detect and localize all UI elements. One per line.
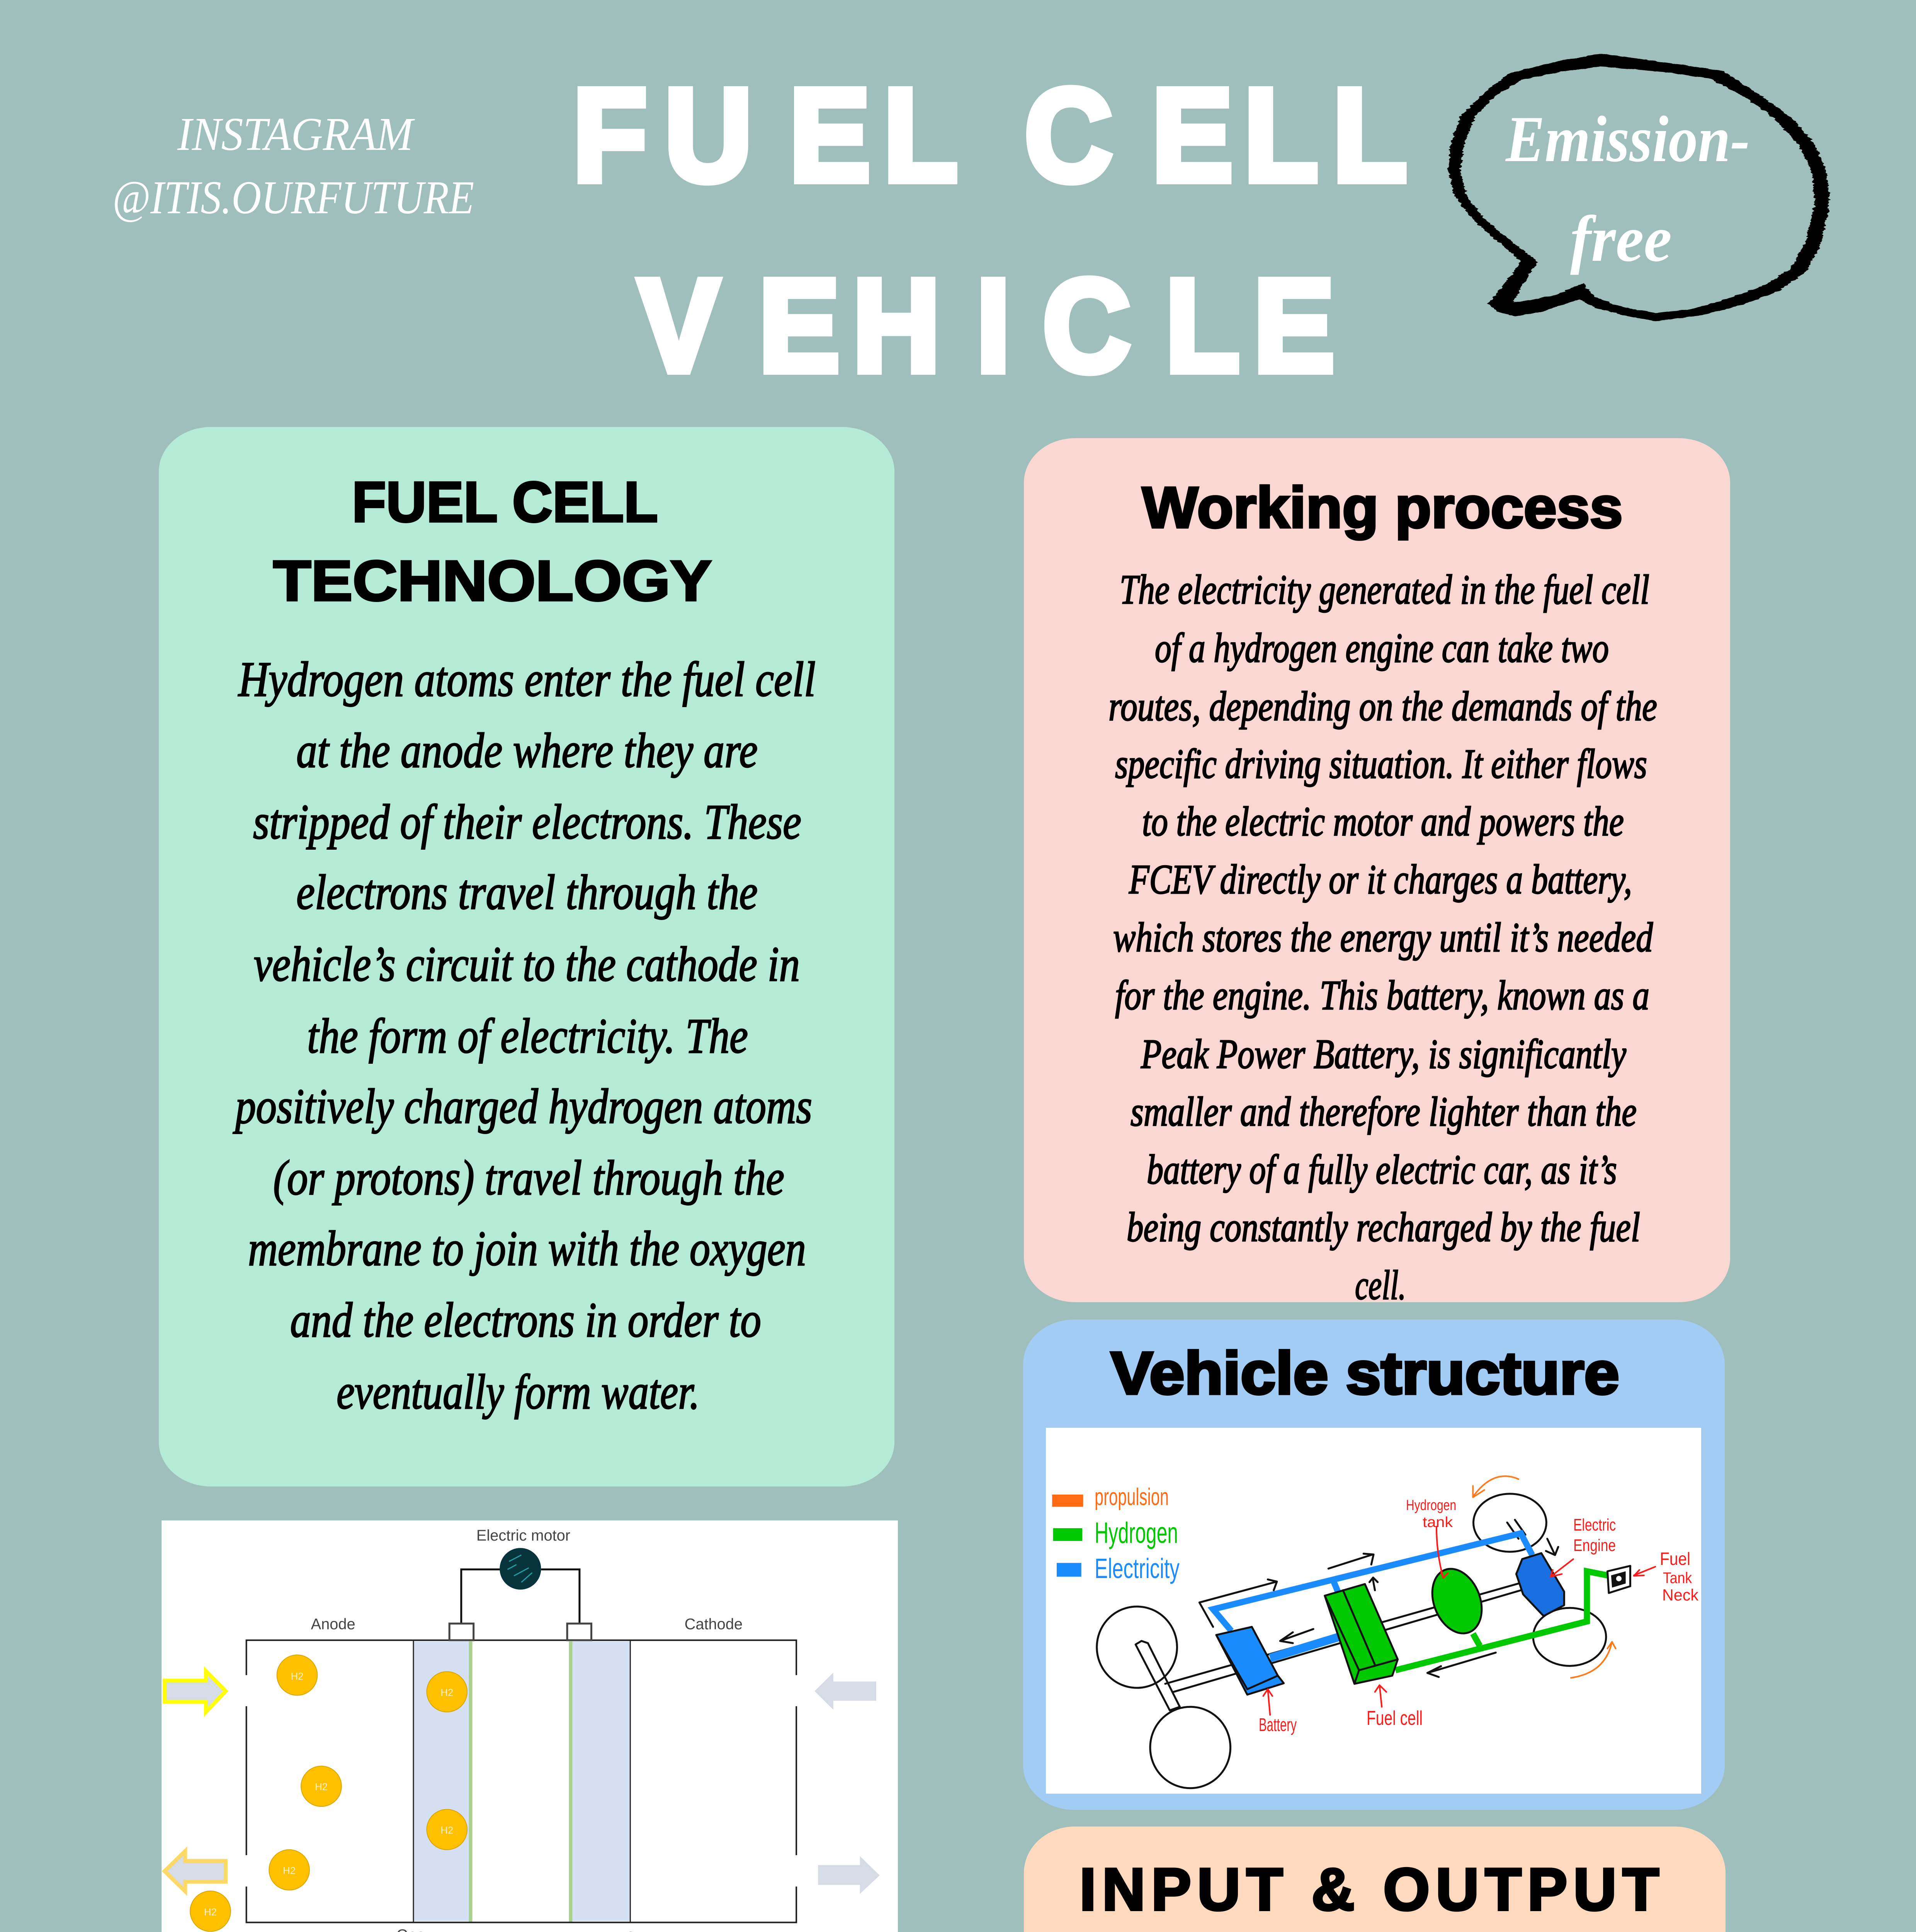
speech bubble: emission-free: Emission- (1505, 103, 1750, 175)
body text: fuel cell technology: (or protons) travel through the (273, 1150, 784, 1205)
body text: working process: for the engine. This battery, known as a (1115, 973, 1649, 1019)
legend labels: Electricity (1095, 1553, 1180, 1584)
body text: working process: being constantly recharged by the fuel (1127, 1204, 1640, 1250)
body text: working process: to the electric motor and powers the (1142, 799, 1624, 845)
body text: fuel cell technology (233, 652, 816, 1419)
fuel tank neck (1607, 1566, 1630, 1593)
circuit wires and terminals (449, 1570, 592, 1640)
cell casing (247, 1640, 796, 1922)
title (573, 62, 1407, 399)
battery (1216, 1627, 1284, 1695)
hydrogen molecules (190, 1655, 467, 1931)
arrows (165, 1671, 880, 1894)
heading: fuel cell technology: FUEL CELL (352, 470, 658, 534)
body text: fuel cell technology: membrane to join with the oxygen (248, 1221, 806, 1276)
legend labels (1095, 1484, 1180, 1584)
hydrogen molecules: H2 (291, 1671, 303, 1682)
body text: fuel cell technology: stripped of their electrons. These (253, 794, 801, 849)
body text: working process: The electricity generated in the fuel cell (1120, 567, 1649, 613)
diagram labels (311, 1527, 743, 1932)
flow arrows (1199, 1539, 1558, 1677)
body text: fuel cell technology: vehicle’s circuit to the cathode in (254, 937, 800, 992)
heading: fuel cell technology: TECHNOLOGY (273, 549, 712, 613)
instagram handle: INSTAGRAM (177, 108, 415, 160)
panel: input and output (1024, 1827, 1726, 1932)
vehicle sketch (1046, 1428, 1701, 1794)
body text: working process (1108, 567, 1657, 1308)
panel: vehicle structure (1023, 1320, 1725, 1810)
body text: fuel cell technology: electrons travel through the (296, 865, 758, 920)
instagram handle: @ITIS.OURFUTURE (112, 172, 474, 224)
body text: working process: smaller and therefore lighter than the (1131, 1089, 1637, 1135)
body text: working process: FCEV directly or it charges a battery, (1129, 857, 1632, 903)
body text: working process: Peak Power Battery, is significantly (1141, 1031, 1626, 1077)
part labels: Tank (1663, 1570, 1692, 1587)
legend swatches (1052, 1495, 1083, 1577)
body text: fuel cell technology: the form of electricity. The (307, 1009, 748, 1063)
part labels: tank (1423, 1514, 1453, 1531)
panel: working process (1024, 438, 1730, 1308)
hydrogen molecules: H2 (440, 1687, 453, 1698)
speech bubble: emission-free: free (1570, 202, 1672, 275)
part labels: Neck (1662, 1586, 1699, 1604)
body text: working process: battery of a fully electric car, as it’s (1147, 1147, 1617, 1193)
hydrogen tank (1426, 1567, 1488, 1635)
title: VEHICLE (638, 252, 1334, 399)
label pointers (1263, 1527, 1655, 1715)
part labels: Fuel cell (1367, 1707, 1423, 1730)
diagram labels: Anode (311, 1616, 355, 1633)
hydrogen molecules: H2 (440, 1825, 453, 1836)
body text: working process: routes, depending on the demands of the (1108, 684, 1657, 730)
body text: working process: cell. (1355, 1262, 1406, 1308)
part labels: Hydrogen (1406, 1497, 1456, 1514)
hydrogen molecules: H2 (315, 1782, 328, 1793)
heading: fuel cell technology (273, 470, 712, 613)
body text: fuel cell technology: at the anode where they are (296, 723, 758, 778)
rotation arrows (1473, 1476, 1616, 1678)
part labels: Engine (1573, 1536, 1616, 1555)
diagram: fuel cell step 1 (162, 1520, 898, 1932)
part labels: Electric (1573, 1515, 1616, 1534)
electric engine (1516, 1553, 1564, 1616)
fuel cell stack (1325, 1584, 1398, 1684)
electricity lines (1213, 1533, 1532, 1631)
instagram handle (112, 108, 474, 224)
body text: fuel cell technology: and the electrons in order to (290, 1293, 761, 1347)
part labels (1259, 1497, 1699, 1735)
legend labels: propulsion (1095, 1484, 1169, 1510)
title: FUEL CELL (573, 62, 1407, 209)
panel: fuel cell technology (159, 427, 894, 1486)
body text: working process: which stores the energy until it’s needed (1113, 915, 1653, 961)
hydrogen molecules: H2 (204, 1907, 217, 1918)
part labels: Battery (1259, 1715, 1297, 1735)
electric motor (500, 1548, 541, 1590)
body text: working process: of a hydrogen engine can take two (1155, 625, 1609, 671)
speech bubble: emission-free (1448, 54, 1829, 321)
gas diffusion layers and membrane (413, 1640, 630, 1922)
diagram labels: Cathode (685, 1616, 743, 1633)
diagram labels: Electric motor (476, 1527, 570, 1544)
heading: working process: Working process (1142, 475, 1623, 540)
body text: fuel cell technology: Hydrogen atoms enter the fuel cell (238, 652, 816, 707)
body text: fuel cell technology: positively charged hydrogen atoms (233, 1079, 812, 1134)
hydrogen molecules: H2 (283, 1866, 296, 1876)
heading: vehicle structure: Vehicle structure (1111, 1340, 1619, 1406)
legend labels: Hydrogen (1095, 1517, 1178, 1549)
heading: input and output: INPUT & OUTPUT (1080, 1856, 1659, 1923)
hydrogen lines (1396, 1571, 1607, 1670)
body text: fuel cell technology: eventually form water. (337, 1364, 700, 1419)
part labels: Fuel (1660, 1549, 1690, 1569)
wheels and axles (1097, 1494, 1606, 1788)
body text: working process: specific driving situation. It either flows (1115, 741, 1647, 787)
